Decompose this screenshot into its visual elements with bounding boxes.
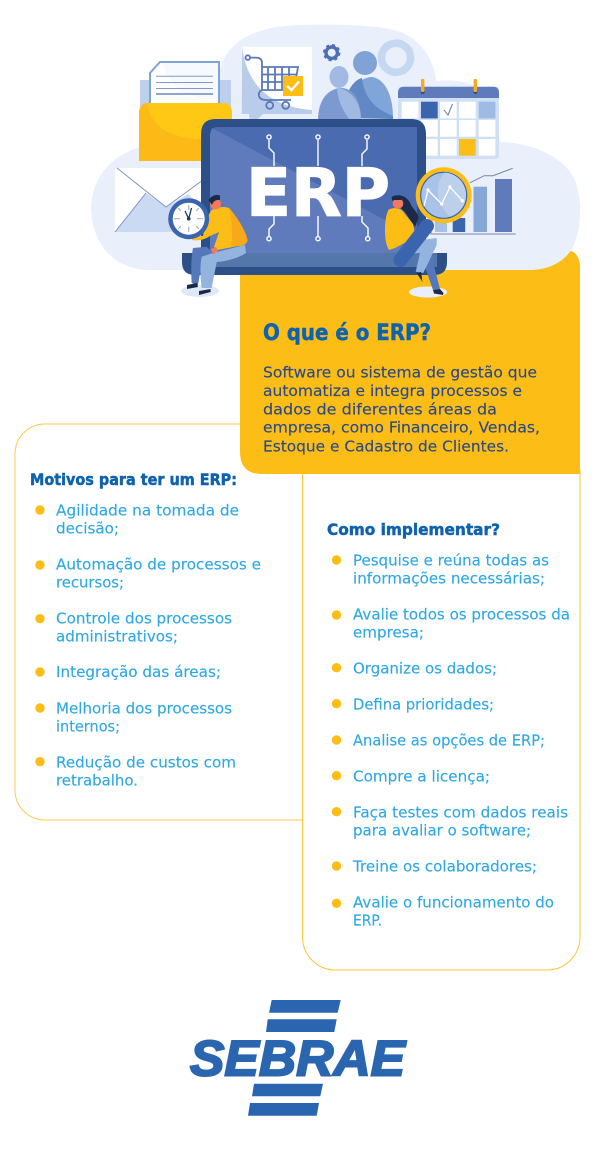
list: etapas: informações necessárias; [353,570,545,588]
panel: motivos para ter um ERP [15,420,344,824]
figure: woman with magnifier [385,167,472,298]
text: definição: Estoque e Cadastro de Clientes. [263,438,509,456]
list: motivos [35,502,261,790]
text: definição: empresa, como Financeiro, Vendas, [263,418,540,436]
icon: gear small [324,45,339,60]
list: motivos: administrativos; [56,628,178,646]
list: etapas: ERP. [353,912,382,930]
logo: SEBRAE: SEBRAE [190,1030,407,1086]
text: definição [263,364,540,456]
list: etapas: Organize os dados; [353,660,497,678]
icon: clock [168,198,209,239]
text: definição: dados de diferentes áreas da [263,400,497,418]
icon: magnifier [400,167,472,260]
list: motivos: Integração das áreas; [56,663,221,681]
list: motivos: retrabalho. [56,772,138,790]
list: etapas: Defina prioridades; [353,696,494,714]
list: etapas: Faça testes com dados reais [353,804,568,822]
list: etapas: Avalie todos os processos da [353,606,570,624]
icon: calendar [398,79,499,159]
figure: man with clock [168,195,248,297]
heading: como implementar: Como implementar? [327,520,500,539]
illustration: ERP scene [91,25,580,298]
panel: o que é o ERP [240,250,580,474]
list: etapas: Avalie o funcionamento do [353,894,554,912]
list: etapas: Pesquise e reúna todas as [353,552,549,570]
circuit traces [267,135,370,241]
icon: document folder [139,62,232,161]
heading: ERP: ERP [246,154,390,232]
text: definição: Software ou sistema de gestão que [263,364,537,382]
background blobs [91,25,580,270]
logo: SEBRAE [190,1000,407,1116]
icon: envelope [115,168,205,232]
list: etapas: Treine os colaboradores; [352,858,537,876]
list: motivos: recursos; [56,574,124,592]
list: motivos: decisão; [56,520,119,538]
list: etapas: Compre a licença; [353,768,490,786]
chart: bars [431,168,516,234]
list: etapas: empresa; [353,624,424,642]
list: motivos: Automação de processos e [56,556,261,574]
list: motivos: internos; [56,718,120,736]
list: motivos: Redução de custos com [56,754,236,772]
heading: o que é o ERP: O que é o ERP? [263,321,431,346]
list: motivos: Controle dos processos [56,610,232,628]
list: etapas [332,552,570,930]
icon: gear large [380,42,412,74]
text: definição: automatiza e integra processos e [263,382,522,400]
heading: motivos: Motivos para ter um ERP: [30,470,237,489]
list: etapas: Analise as opções de ERP; [353,732,545,750]
icon: people [318,51,393,120]
laptop [182,119,447,275]
list: etapas: para avaliar o software; [353,822,531,840]
icon: shopping cart card [242,47,312,127]
list: motivos: Agilidade na tomada de [56,502,239,520]
list: motivos: Melhoria dos processos [56,700,232,718]
panel: como implementar [302,470,580,970]
